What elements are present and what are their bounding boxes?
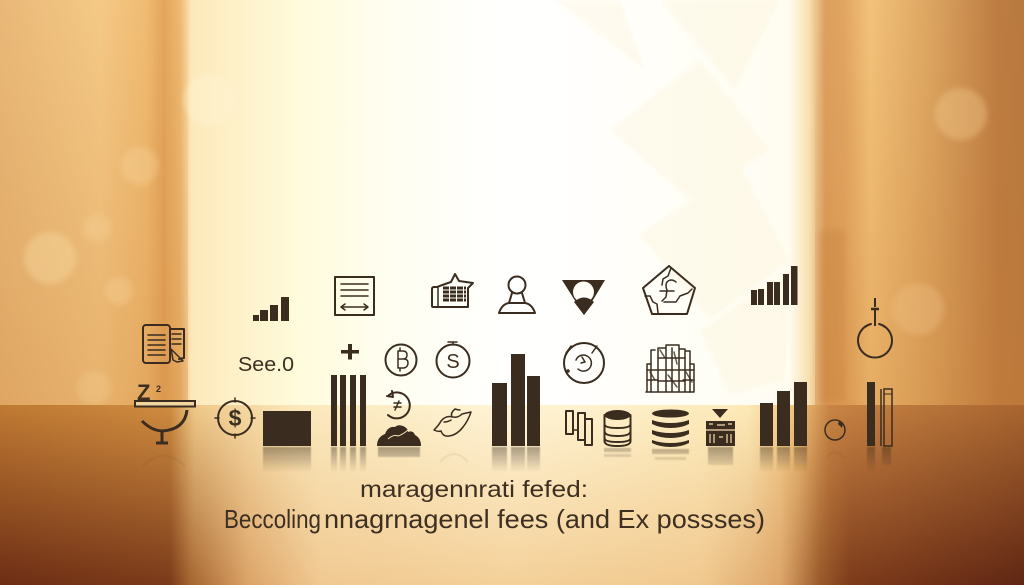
faint arc reflections xyxy=(143,452,844,466)
icon: calendar building xyxy=(432,274,473,307)
icon: rotating coin xyxy=(387,391,410,418)
floor xyxy=(0,405,1024,585)
icon: pentagon pound xyxy=(643,266,695,314)
icon: tower building xyxy=(646,345,694,392)
icon: pendant ring xyxy=(858,298,892,358)
icon: person xyxy=(499,276,535,313)
icon: bitcoin coin xyxy=(386,344,416,376)
icon: document with arrow xyxy=(335,277,374,315)
icon: inverted triangle xyxy=(562,280,605,315)
bar chart: three bars xyxy=(492,354,540,446)
icon: four tall bars xyxy=(331,375,366,446)
icon: shelf bowl xyxy=(135,401,195,443)
icon: machine box xyxy=(706,409,735,446)
icon: database solid xyxy=(652,410,689,447)
icon: plus xyxy=(341,344,359,360)
icon: open book xyxy=(143,325,184,363)
icon: Z squared xyxy=(137,380,161,405)
bokeh lights xyxy=(24,74,987,405)
icon: dollar target xyxy=(215,398,255,438)
heading text: Beccoling xyxy=(224,504,321,534)
icon: small signal bars xyxy=(253,297,289,321)
icon: dollar stopwatch: S xyxy=(446,351,460,373)
icon reflections xyxy=(263,447,891,472)
icon: Z squared: 2 xyxy=(156,384,161,394)
icon: cloud xyxy=(377,425,421,446)
icon: database outline xyxy=(604,410,630,446)
icon: Z squared: Z xyxy=(137,380,150,405)
icon: bird xyxy=(434,409,471,436)
heading text xyxy=(224,476,765,534)
bar chart: rising bars xyxy=(760,382,807,446)
icon: stacked rectangles xyxy=(566,411,592,445)
icon: dollar target: $ xyxy=(229,405,242,431)
heading text: nnagrnagenel fees (and Ex possses) xyxy=(324,504,765,534)
icon: tall bar pair xyxy=(867,382,892,446)
icon: large signal bars xyxy=(751,266,798,305)
icon: dollar stopwatch xyxy=(436,342,470,378)
icon: refresh ring xyxy=(825,420,845,440)
icon: circular target xyxy=(564,343,604,383)
text: See.0: See.0 xyxy=(238,354,294,376)
heading text: maragennrati fefed: xyxy=(360,476,588,502)
black rectangle xyxy=(263,411,311,446)
faint geometric shapes xyxy=(555,0,790,395)
